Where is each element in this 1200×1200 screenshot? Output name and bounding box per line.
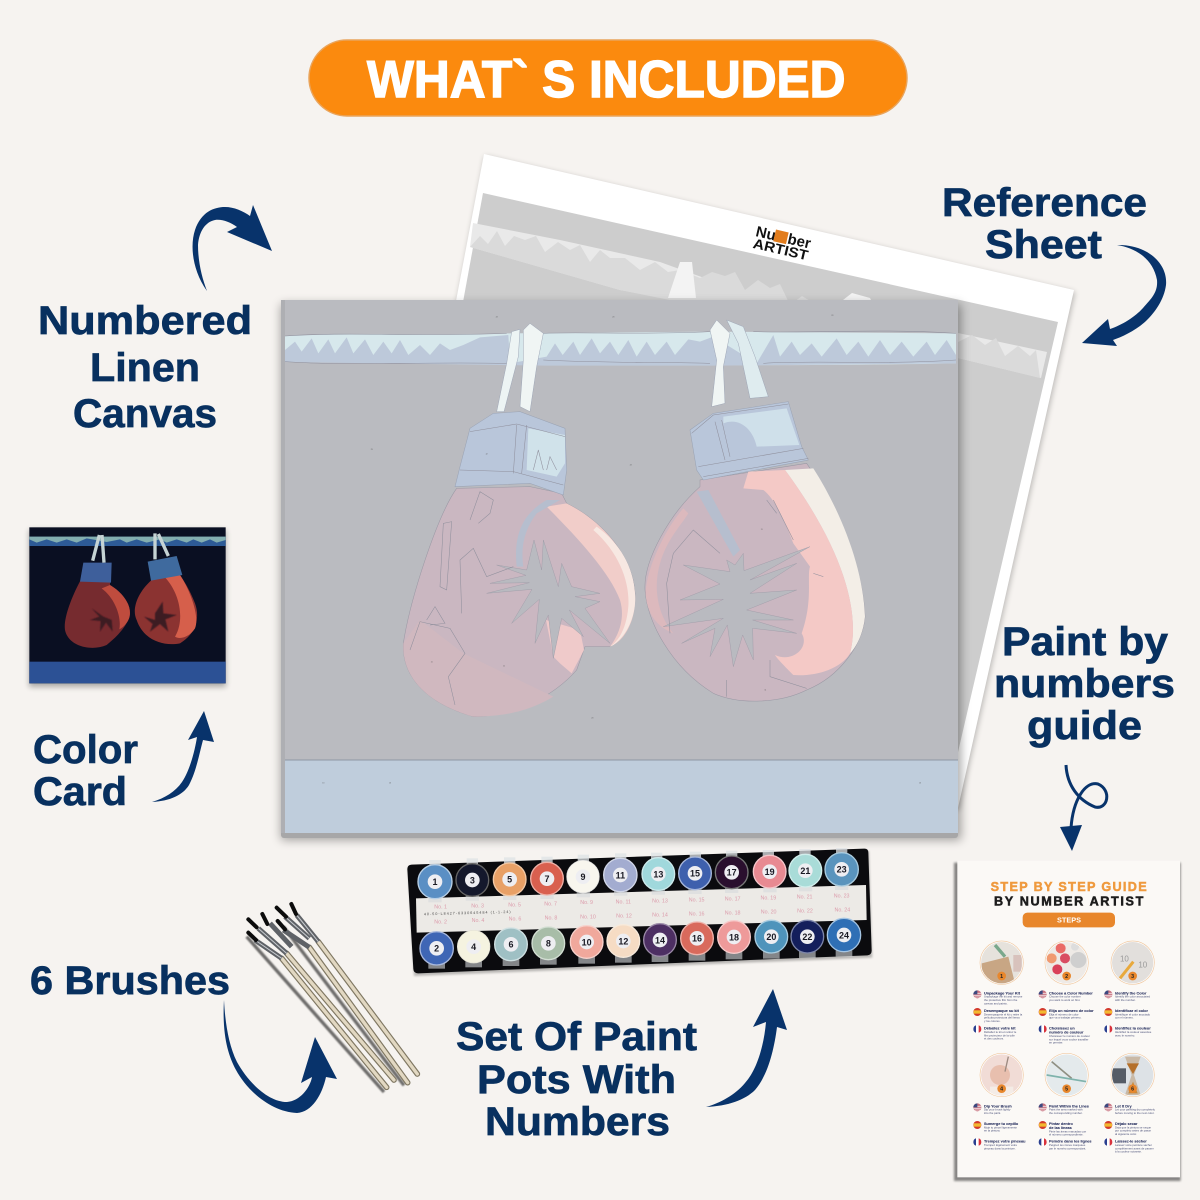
step 4 image: 4 — [1000, 1087, 1003, 1093]
step 2 image: 2 — [1065, 974, 1068, 980]
step 1 to 3 instructions: Identificar el color — [1115, 1009, 1148, 1013]
sheet logo: Nu ber — [754, 223, 813, 253]
step 4 to 6 instructions: par le numéro correspondant. — [1049, 1146, 1086, 1150]
step 1 to 3 instructions: Choisissez un — [1049, 1027, 1075, 1031]
label: numbered linen canvas: Linen — [90, 346, 200, 390]
right glove — [645, 320, 865, 701]
step 3 image: 10 — [1120, 955, 1129, 964]
label strip: No. 2 — [434, 919, 447, 925]
step 4 to 6 instructions: Peignez les zones marquées — [1049, 1143, 1086, 1147]
label: 6 brushes: 6 Brushes — [30, 959, 230, 1003]
step 1 to 3 instructions: Identifique el color asociado — [1115, 1012, 1150, 1016]
step 4 image — [980, 1053, 1023, 1097]
step 1 to 3 instructions: Identify the Color — [1115, 991, 1147, 995]
paint pot strip — [407, 848, 872, 976]
guide heading: BY NUMBER ARTIST — [994, 895, 1144, 909]
card left glove — [65, 580, 130, 648]
label strip: No. 10 — [580, 914, 596, 920]
pot number labels: 17 — [727, 868, 737, 878]
arrow: to paint pots — [706, 989, 787, 1107]
label strip — [416, 885, 867, 933]
step 1 to 3 instructions: avec le numéro. — [1115, 1033, 1135, 1037]
label strip: No. 11 — [616, 899, 631, 905]
step 4 to 6 instructions: Moje tu pincel ligeramente — [984, 1125, 1017, 1129]
label: color card: Card — [33, 770, 127, 814]
pot number labels: 5 — [507, 875, 512, 885]
step 4 to 6 instructions: Let It Dry — [1115, 1104, 1132, 1108]
step 1 to 3 instructions: Identifiez la couleur — [1115, 1027, 1151, 1031]
label strip: No. 17 — [725, 896, 741, 902]
brush shadow — [247, 927, 404, 1092]
label strip: No. 14 — [652, 912, 668, 918]
step 5 image: 5 — [1065, 1087, 1068, 1093]
label: set of paint pots: Pots With — [477, 1058, 676, 1102]
pot number labels: 14 — [655, 935, 665, 945]
label strip: No. 4 — [472, 918, 484, 924]
pot number labels — [428, 862, 851, 956]
step 6 image: 6 — [1131, 1087, 1134, 1093]
label strip: No. 23 — [834, 894, 850, 900]
pot number labels: 13 — [653, 869, 663, 879]
step 1 to 3 instructions: Choose a Color Number — [1049, 991, 1093, 995]
label strip: No. 21 — [797, 895, 813, 901]
bristles — [248, 904, 296, 940]
step 1 to 3 instructions: the protective film from the — [984, 998, 1018, 1002]
step 1 to 3 instructions: with the number. — [1115, 998, 1136, 1002]
sheet logo: ARTIST — [752, 235, 810, 263]
step 4 to 6 instructions: complètement avant de passer — [1115, 1146, 1154, 1150]
steps pill: STEPS — [1057, 916, 1081, 925]
label: reference sheet: Reference — [942, 181, 1147, 225]
label: set of paint pots: Set Of Paint — [456, 1015, 697, 1059]
right straps — [710, 320, 730, 407]
step 4 to 6 instructions: Laissez-le sécher — [1115, 1140, 1147, 1144]
label: numbered linen canvas: Numbered — [38, 299, 252, 343]
pot number labels: 4 — [471, 942, 476, 952]
step 1 to 3 instructions: Elija el número de color — [1049, 1012, 1079, 1016]
step 4 to 6 instructions: por completo antes de pasar — [1115, 1129, 1151, 1133]
pot number labels: 1 — [432, 877, 437, 887]
canvas numbers: 23 — [831, 315, 833, 317]
label: paint by numbers guide: guide — [1027, 704, 1142, 748]
step 3 image: 3 — [1131, 974, 1134, 980]
bottom row pots — [420, 918, 861, 969]
step 4 to 6 instructions: Deja que la pintura se seque — [1115, 1125, 1151, 1129]
guide heading — [991, 880, 1147, 909]
step 4 to 6 instructions: el número correspondiente. — [1049, 1133, 1084, 1137]
step 4 to 6 instructions: Let your painting dry completely — [1115, 1108, 1156, 1112]
step 4 to 6 instructions: al siguiente color. — [1115, 1132, 1137, 1136]
step 1 to 3 instructions — [973, 990, 1152, 1045]
step 4 to 6 instructions: Sumerge tu cepillo — [984, 1122, 1019, 1126]
step 4 to 6 instructions: en la pintura. — [984, 1129, 1001, 1133]
step 4 to 6 instructions: à la couleur suivante. — [1115, 1150, 1142, 1154]
pot number labels: 11 — [616, 870, 625, 880]
pot number labels: 22 — [802, 932, 812, 942]
label: paint by numbers guide: numbers — [994, 662, 1175, 706]
step 1 to 3 instructions: que va a trabajar primero. — [1049, 1016, 1082, 1020]
step 1 to 3 instructions: film protecteur de la toile — [984, 1033, 1015, 1037]
label strip: No. 22 — [797, 909, 813, 915]
arrow: to guide — [1060, 765, 1107, 851]
step 4 to 6 instructions: Peindre dans les lignes — [1049, 1140, 1092, 1144]
canvas numbers: 11 — [764, 690, 766, 692]
pot number labels: 8 — [546, 939, 551, 949]
step 4 to 6 instructions: Dip Your Brush — [984, 1104, 1012, 1108]
step 1 to 3 instructions: et des couleurs. — [984, 1037, 1004, 1041]
step 4 to 6 instructions — [973, 1103, 1156, 1154]
step 4 to 6 instructions: before moving to the next color. — [1115, 1111, 1155, 1115]
rope — [285, 331, 956, 366]
label strip: No. 16 — [689, 911, 705, 917]
label: numbered linen canvas: Canvas — [73, 392, 217, 436]
label strip: No. 15 — [689, 897, 705, 903]
step 4 to 6 instructions: pinceau dans la peinture. — [984, 1146, 1016, 1150]
step 1 to 3 instructions: sur lequel vous voulez travailler — [1049, 1037, 1089, 1041]
step 1 to 3 instructions: Déballez le kit et retirez le — [984, 1030, 1017, 1034]
step 4 to 6 instructions: Dip your brush lightly — [984, 1108, 1011, 1112]
title banner: WHAT` S INCLUDED — [367, 50, 846, 108]
step 1 image: 1 — [1000, 974, 1003, 980]
label: set of paint pots — [456, 1015, 697, 1144]
step 2 image — [1045, 941, 1088, 985]
step 4 to 6 instructions: Déjalo secar — [1115, 1122, 1138, 1126]
pot number labels: 12 — [618, 936, 628, 946]
brushes — [247, 904, 417, 1092]
canvas numbers: 11 — [761, 529, 763, 531]
pot number labels: 7 — [544, 874, 549, 884]
handles — [282, 942, 417, 1087]
canvas numbers: 22 — [486, 453, 488, 455]
step 1 to 3 instructions: película protectora del lienzo — [984, 1016, 1020, 1020]
label strip: No. 24 — [834, 908, 850, 914]
arrow: to canvas — [193, 205, 272, 291]
label strip: No. 19 — [760, 895, 776, 901]
label strip: No. 9 — [580, 900, 593, 906]
canvas numbers: 23 — [591, 717, 593, 719]
pot number labels: 18 — [729, 932, 739, 942]
step 4 to 6 instructions: de las líneas — [1049, 1126, 1072, 1130]
canvas numbers: 11 — [431, 662, 433, 664]
pot number labels: 10 — [582, 937, 592, 947]
top row pots — [418, 848, 858, 902]
label strip: No. 13 — [652, 898, 668, 904]
step 4 to 6 instructions: the corresponding number. — [1049, 1111, 1083, 1115]
pot number labels: 21 — [800, 866, 810, 876]
canvas numbers: 23 — [612, 316, 614, 318]
pot number labels: 3 — [470, 875, 475, 885]
step 4 to 6 instructions: into the paint. — [984, 1111, 1001, 1115]
label: reference sheet: Sheet — [985, 223, 1102, 267]
step 3 image — [1111, 941, 1154, 985]
pot number labels: 9 — [580, 872, 585, 882]
step 1 image — [980, 941, 1023, 985]
label strip: No. 7 — [544, 901, 557, 907]
arrow: to brushes — [224, 1000, 337, 1113]
guide heading: STEP BY STEP GUIDE — [991, 880, 1147, 894]
step 1 to 3 instructions: Unpackage Your Kit — [984, 991, 1021, 995]
step 4 to 6 instructions: Pintar dentro — [1049, 1122, 1073, 1126]
step 1 to 3 instructions: you want to work on first. — [1049, 998, 1080, 1002]
arrow: to reference sheet — [1082, 245, 1166, 346]
pot number labels: 16 — [692, 934, 702, 944]
step 1 to 3 instructions: Identifiez la couleur associée — [1115, 1030, 1152, 1034]
canvas numbers: 13 — [919, 782, 921, 784]
label strip: No. 6 — [509, 917, 521, 923]
canvas numbers: 23 — [371, 449, 373, 451]
label: numbered linen canvas — [38, 299, 252, 436]
step 4 to 6 instructions: Laissez votre peinture sécher — [1115, 1143, 1152, 1147]
left cuff — [455, 412, 567, 495]
label: paint by numbers guide: Paint by — [1002, 620, 1169, 664]
color card — [29, 527, 226, 687]
pot number labels: 23 — [837, 865, 847, 875]
step 1 to 3 instructions: y los colores. — [984, 1019, 1001, 1023]
step 4 to 6 instructions: Trempez votre pinceau — [984, 1140, 1026, 1144]
pot number labels: 2 — [434, 944, 439, 954]
ferrules — [255, 915, 318, 958]
canvas numbers: 23 — [630, 465, 632, 467]
arrow: to color card — [152, 711, 214, 802]
right cuff — [690, 402, 808, 480]
label: set of paint pots: Numbers — [485, 1100, 670, 1144]
pot number labels: 15 — [690, 869, 700, 879]
pot number labels: 24 — [839, 930, 849, 940]
step 3 image: 10 — [1138, 960, 1148, 969]
title banner — [309, 40, 907, 116]
canvas artwork in local coordinates — [285, 315, 956, 784]
step 1 to 3 instructions: Choisissez le numéro de couleur — [1049, 1034, 1090, 1038]
step 1 to 3 instructions: Desempaque su kit — [984, 1009, 1020, 1013]
left straps — [497, 329, 520, 412]
step 1 to 3 instructions: en premier. — [1049, 1041, 1063, 1045]
step 4 to 6 instructions: Pinte las áreas marcadas con — [1049, 1129, 1087, 1133]
step 1 to 3 instructions: Choose the color number — [1049, 995, 1081, 999]
label strip: No. 3 — [471, 904, 484, 910]
canvas numbers: 11 — [503, 666, 505, 668]
canvas numbers: 13 — [389, 782, 391, 784]
label strip: No. 1 — [434, 905, 447, 911]
canvas numbers: 23 — [496, 316, 498, 318]
pot number labels: 6 — [508, 940, 513, 950]
step 1 to 3 instructions: numéro de couleur — [1049, 1031, 1084, 1035]
canvas numbers — [322, 315, 921, 784]
step 6 image — [1111, 1053, 1154, 1097]
label strip: No. 5 — [508, 902, 521, 908]
numbered linen canvas — [281, 300, 961, 840]
card right glove — [135, 575, 197, 644]
step by step guide poster — [954, 861, 1181, 1181]
left glove — [403, 323, 635, 717]
label strip: No. 20 — [761, 910, 777, 916]
label strip: No. 18 — [725, 910, 741, 916]
step 1 to 3 instructions: con el número. — [1115, 1016, 1134, 1020]
steps pill — [1023, 913, 1115, 927]
sheet logo — [752, 223, 813, 263]
step 4 to 6 instructions: Trempez légèrement votre — [984, 1143, 1017, 1147]
reference sheet — [380, 154, 1075, 810]
label: reference sheet — [942, 181, 1147, 267]
label: color card: Color — [33, 728, 138, 772]
step 4 to 6 instructions: Paint Within the Lines — [1049, 1104, 1089, 1108]
step 1 to 3 instructions: canvas and paints. — [984, 1001, 1008, 1005]
canvas numbers: 13 — [322, 782, 324, 784]
label strip: 40-50-L8427-6330645484 (1-1-24) — [424, 910, 511, 916]
step 4 to 6 instructions: Paint the area marked with — [1049, 1108, 1083, 1112]
step 5 image — [1045, 1053, 1088, 1097]
step 1 to 3 instructions: Unpackage the kit and remove — [984, 995, 1023, 999]
step 1 to 3 instructions: Déballez votre kit — [984, 1027, 1016, 1031]
step 1 to 3 instructions: Elija un número de color — [1049, 1009, 1094, 1013]
label strip: No. 8 — [545, 915, 557, 921]
label: paint by numbers guide — [994, 620, 1175, 748]
label strip: No. 12 — [616, 913, 632, 919]
pot number labels: 19 — [765, 867, 775, 877]
step 1 to 3 instructions: Desempaquete el kit y retire la — [984, 1012, 1023, 1016]
step 1 to 3 instructions: Identify the color associated — [1115, 995, 1150, 999]
pot number labels: 20 — [766, 932, 776, 942]
label: color card — [33, 728, 138, 814]
